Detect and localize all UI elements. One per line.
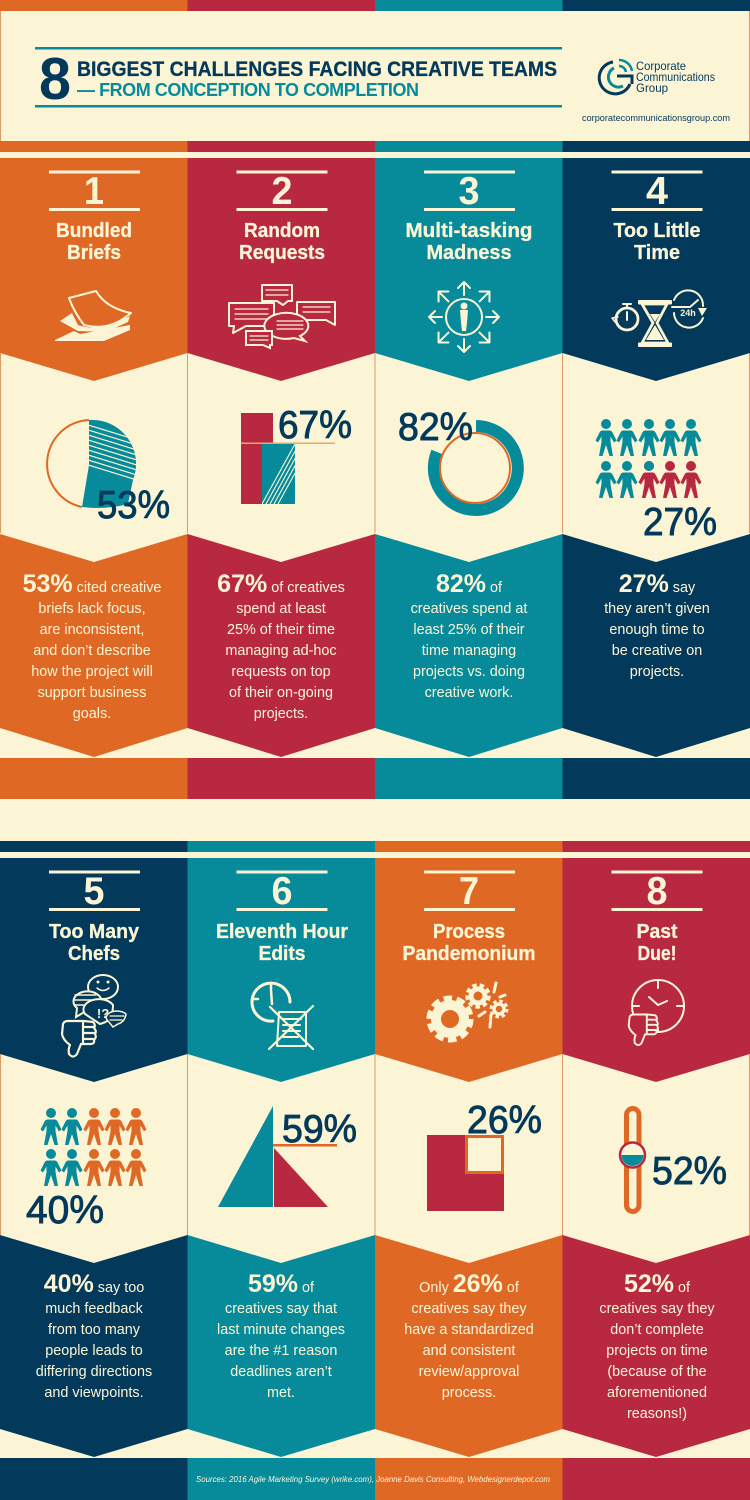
body text bbox=[217, 570, 345, 722]
divider band 1 bbox=[0, 141, 750, 152]
panel: 6 eleventh hour edits bbox=[188, 858, 375, 1500]
number 5 bbox=[49, 870, 140, 913]
body text: differing directions bbox=[36, 1364, 152, 1380]
heading: Madness bbox=[426, 242, 512, 264]
body text: 52% of bbox=[624, 1270, 691, 1298]
divider band 2 bbox=[0, 841, 750, 852]
heading: Bundled bbox=[56, 220, 132, 242]
heading: Pandemonium bbox=[402, 943, 536, 965]
icon: clock with thumb down bbox=[629, 980, 684, 1045]
number 2 bbox=[236, 170, 328, 213]
heading: Multi-tasking bbox=[406, 220, 532, 242]
icon: chat bubbles and thumb down: !? bbox=[97, 1006, 109, 1021]
body text: 25% of their time bbox=[227, 622, 335, 638]
body text: least 25% of their bbox=[413, 622, 525, 638]
number 7 bbox=[424, 870, 515, 913]
heading: Too Little bbox=[614, 220, 700, 242]
body text: reasons!) bbox=[627, 1406, 687, 1422]
body text: briefs lack focus, bbox=[38, 601, 146, 617]
body text: 40% say too bbox=[44, 1270, 144, 1298]
body text: creatives say that bbox=[225, 1301, 337, 1317]
panel: 1 bundled briefs bbox=[0, 158, 188, 799]
body text: aforementioned bbox=[607, 1385, 707, 1401]
title: BIGGEST CHALLENGES FACING CREATIVE TEAMS bbox=[77, 57, 557, 81]
body text: don’t complete bbox=[610, 1322, 704, 1338]
body text: creatives say they bbox=[599, 1301, 715, 1317]
number 6 bbox=[236, 870, 328, 913]
icon: stopwatch, hourglass and 24h clock bbox=[612, 290, 707, 347]
heading: Due! bbox=[638, 943, 676, 965]
stat 27%: 27% bbox=[643, 501, 717, 544]
body text: Only 26% of bbox=[419, 1270, 520, 1298]
icon: clock and crossed-out document bbox=[252, 983, 313, 1049]
body text: (because of the bbox=[607, 1364, 707, 1380]
header bbox=[35, 46, 562, 112]
body text: 82% of bbox=[436, 570, 503, 598]
number 7: 7 bbox=[459, 870, 479, 913]
number 2: 2 bbox=[272, 170, 292, 213]
number 4 bbox=[612, 170, 702, 213]
icon: gears bbox=[429, 983, 507, 1040]
panel: 5 too many chefs bbox=[0, 858, 188, 1500]
icon: stopwatch, hourglass and 24h clock: 24h bbox=[680, 308, 696, 318]
stat 53%: 53% bbox=[97, 484, 170, 527]
body text: creatives say they bbox=[411, 1301, 527, 1317]
triangle graphic 59% bbox=[218, 1106, 337, 1207]
panel: 3 multi-tasking madness bbox=[375, 158, 562, 799]
body text: time managing bbox=[422, 643, 516, 659]
heading: Too Many bbox=[49, 921, 140, 943]
donut chart 82% bbox=[434, 426, 518, 510]
panel: 2 random requests bbox=[188, 158, 375, 799]
logo: Communications bbox=[636, 70, 715, 84]
stat 67%: 67% bbox=[278, 404, 352, 447]
body text: requests on top bbox=[231, 664, 331, 680]
pie chart 53% bbox=[47, 420, 140, 508]
body text: projects on time bbox=[606, 1343, 708, 1359]
stat 59%: 59% bbox=[282, 1108, 357, 1151]
panel: 8 past due bbox=[562, 858, 750, 1500]
number 6: 6 bbox=[272, 870, 292, 913]
body text: enough time to bbox=[609, 622, 705, 638]
heading bbox=[406, 220, 532, 264]
icon: speech bubbles bbox=[229, 285, 335, 348]
stat 40%: 40% bbox=[26, 1189, 104, 1232]
body text: 67% of creatives bbox=[217, 570, 345, 598]
heading: Requests bbox=[239, 242, 325, 264]
heading: Process bbox=[433, 921, 505, 943]
heading: Briefs bbox=[67, 242, 121, 264]
icon: chat bubbles and thumb down bbox=[62, 975, 126, 1056]
body text: they aren’t given bbox=[604, 601, 710, 617]
body text: last minute changes bbox=[217, 1322, 345, 1338]
icon: paper stack bbox=[55, 291, 131, 341]
square graphic 26% bbox=[427, 1135, 504, 1211]
body text: have a standardized bbox=[404, 1322, 534, 1338]
body text: creative work. bbox=[425, 685, 513, 701]
number 1 bbox=[49, 170, 140, 213]
body text: managing ad-hoc bbox=[225, 643, 337, 659]
logo bbox=[599, 59, 715, 95]
body text: spend at least bbox=[236, 601, 326, 617]
heading: Past bbox=[636, 921, 678, 943]
number 3 bbox=[424, 170, 515, 213]
body text: process. bbox=[442, 1385, 496, 1401]
heading: Time bbox=[634, 242, 680, 264]
panel: 7 process pandemonium bbox=[375, 858, 562, 1500]
body text: and viewpoints. bbox=[44, 1385, 144, 1401]
body text: projects. bbox=[254, 706, 308, 722]
body text: be creative on bbox=[612, 643, 702, 659]
body text: from too many bbox=[48, 1322, 141, 1338]
panel: 4 too little time bbox=[562, 158, 750, 799]
number 8: 8 bbox=[646, 870, 668, 913]
stat 82%: 82% bbox=[398, 406, 473, 449]
body text bbox=[217, 1270, 345, 1401]
number 1: 1 bbox=[84, 170, 104, 213]
body text: creatives spend at bbox=[411, 601, 527, 617]
body text bbox=[36, 1270, 152, 1401]
logo: Group bbox=[636, 81, 668, 95]
body text: how the project will bbox=[31, 664, 153, 680]
stat 26%: 26% bbox=[467, 1099, 542, 1142]
body text bbox=[411, 570, 527, 701]
icon: person with arrows bbox=[429, 282, 499, 352]
body text: projects vs. doing bbox=[413, 664, 525, 680]
body text bbox=[604, 570, 710, 680]
body text: are inconsistent, bbox=[40, 622, 144, 638]
number 4: 4 bbox=[646, 170, 668, 213]
heading bbox=[49, 921, 140, 965]
sources: Sources: 2016 Agile Marketing Survey (wrike.com), Joanne Davis Consulting, Webdesignerdepot.com bbox=[196, 1474, 550, 1484]
body text: of their on-going bbox=[229, 685, 333, 701]
body text: goals. bbox=[73, 706, 111, 722]
top colour bar bbox=[0, 0, 750, 11]
body text: 27% say bbox=[619, 570, 696, 598]
slider graphic 52% bbox=[620, 1108, 645, 1212]
title number: 8 bbox=[39, 46, 71, 112]
body text: and don’t describe bbox=[33, 643, 151, 659]
heading bbox=[614, 220, 700, 264]
heading: Edits bbox=[258, 943, 306, 965]
body text: deadlines aren’t bbox=[230, 1364, 332, 1380]
body text: much feedback bbox=[45, 1301, 144, 1317]
number 3: 3 bbox=[458, 170, 480, 213]
heading bbox=[56, 220, 132, 264]
subtitle: — FROM CONCEPTION TO COMPLETION bbox=[77, 80, 419, 100]
body text: people leads to bbox=[45, 1343, 143, 1359]
body text: and consistent bbox=[423, 1343, 515, 1359]
logo text: Corporate bbox=[636, 59, 686, 73]
heading bbox=[636, 921, 678, 965]
heading bbox=[216, 921, 348, 965]
body text: support business bbox=[38, 685, 146, 701]
heading: Chefs bbox=[68, 943, 120, 965]
bar graphic 67% bbox=[241, 413, 335, 504]
heading bbox=[239, 220, 325, 264]
heading: Eleventh Hour bbox=[216, 921, 348, 943]
body text bbox=[599, 1270, 715, 1422]
body text: met. bbox=[267, 1385, 295, 1401]
logo mark bbox=[599, 60, 632, 94]
body text bbox=[23, 570, 161, 722]
body text: 59% of bbox=[248, 1270, 315, 1298]
people chart 40% bbox=[40, 1108, 146, 1186]
website url: corporatecommunicationsgroup.com bbox=[582, 113, 730, 124]
body text: 53% cited creative bbox=[23, 570, 161, 598]
people chart 27% bbox=[596, 419, 702, 498]
number 5: 5 bbox=[84, 870, 104, 913]
heading: Random bbox=[244, 220, 320, 242]
body text bbox=[404, 1270, 534, 1401]
body text: projects. bbox=[630, 664, 684, 680]
heading bbox=[402, 921, 536, 965]
stat 52%: 52% bbox=[652, 1150, 727, 1193]
body text: review/approval bbox=[419, 1364, 519, 1380]
number 8 bbox=[612, 870, 702, 913]
body text: are the #1 reason bbox=[225, 1343, 337, 1359]
